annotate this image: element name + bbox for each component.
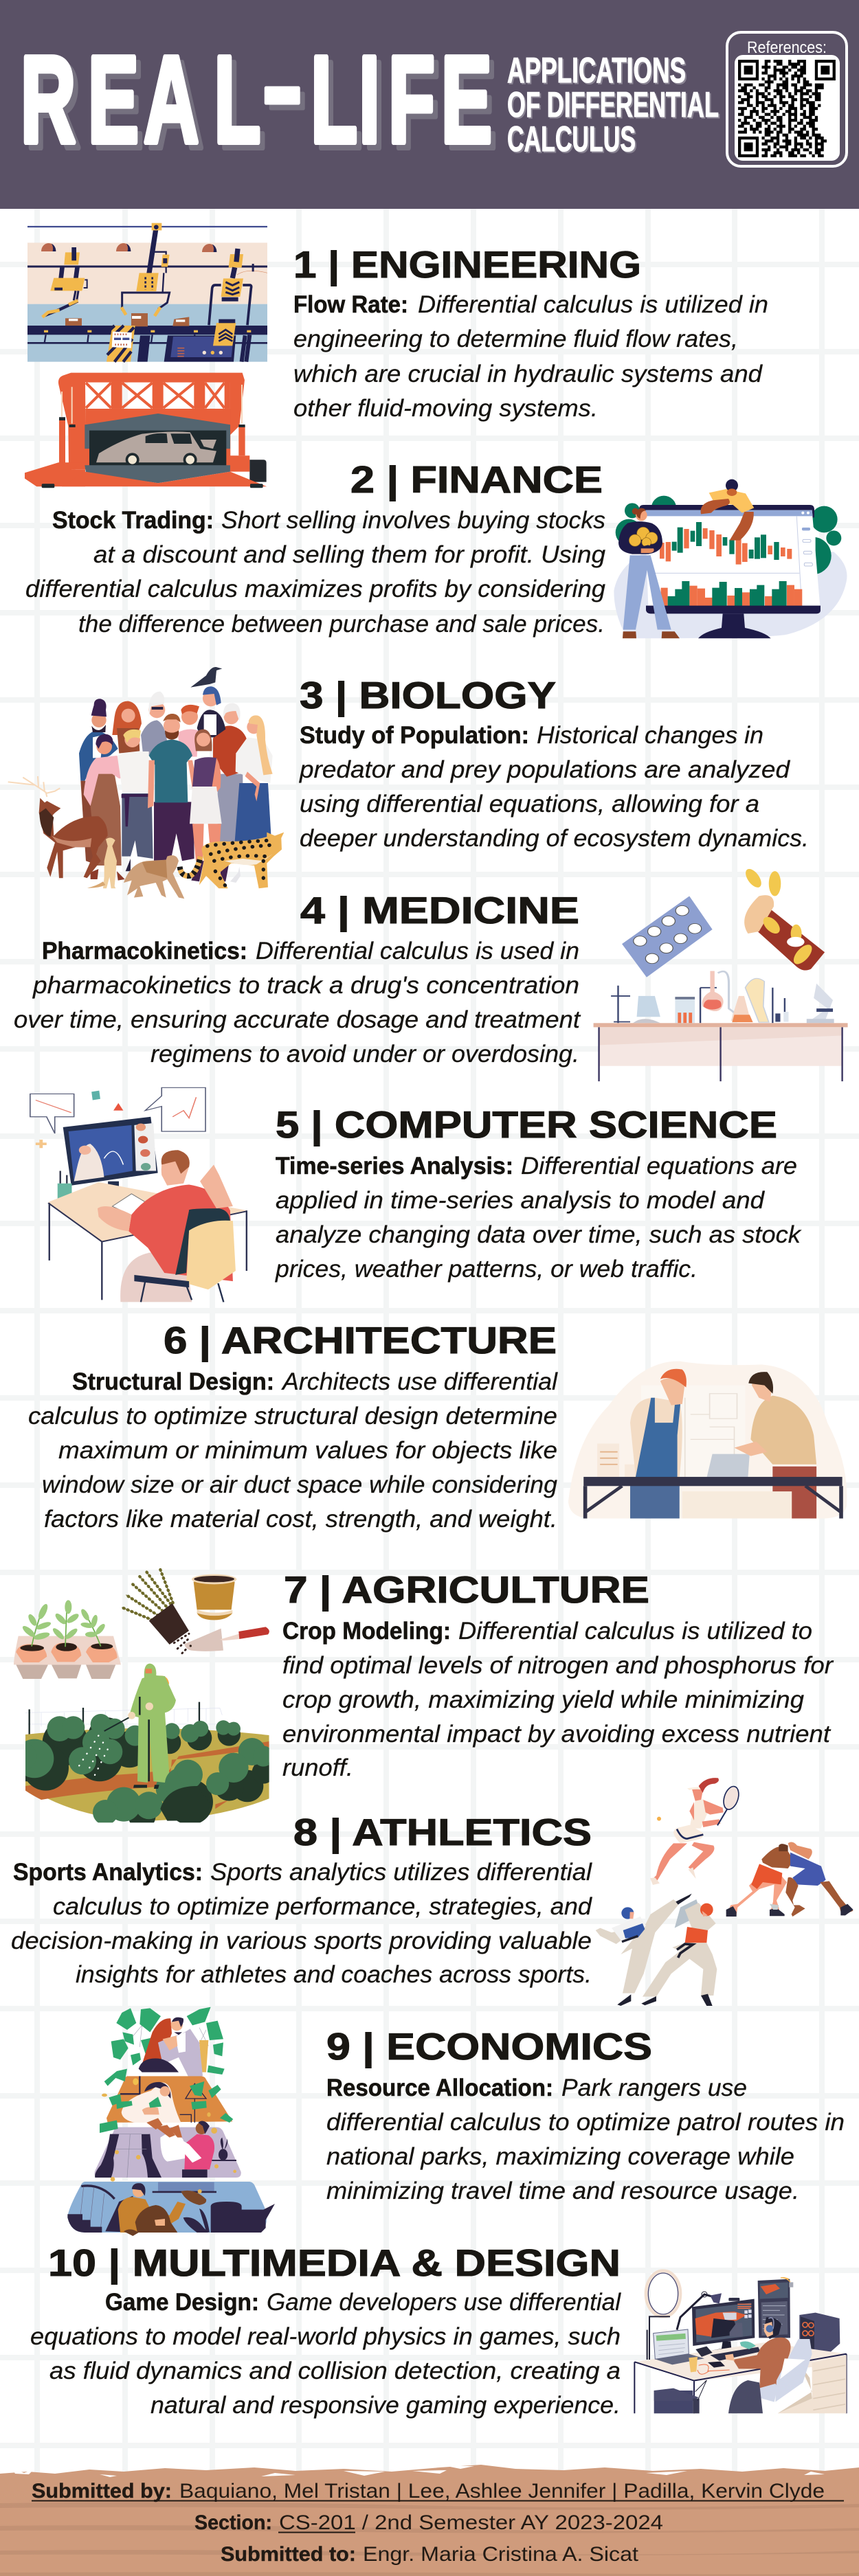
subtitle: CALCULUS [507,120,636,159]
body text: differential calculus maximizes profits by considering [25,576,606,602]
illustrations: tennis, wrestling, taekwondo [596,1778,854,2006]
heading: 4 | MEDICINE [300,889,579,932]
body text: Differential calculus is utilized in [418,291,768,318]
torn paper band [0,2465,859,2576]
body text: Differential calculus is utilized to [458,1618,812,1645]
illustrations: seedlings, plant, pot, trowel, sprayer in field [9,1570,275,1829]
body text: analyze changing data over time, such as stock [276,1221,802,1248]
body text: minimizing travel time and resource usage. [326,2178,799,2204]
icon: flower pot [192,1574,236,1620]
body text: applied in time-series analysis to model and [276,1187,766,1214]
panel: 3 biology [8,667,809,899]
body text [30,2289,621,2419]
illustration: stock chart monitor [614,479,847,638]
title: LIFE [311,30,492,168]
body text: Architects use differential [281,1368,558,1395]
body text: differential calculus to optimize patrol routes in [326,2109,845,2136]
body text: over time, ensuring accurate dosage and treatment [14,1006,581,1033]
icon: trowel [184,1627,269,1651]
second tier [102,2069,233,2123]
heading: 3 | BIOLOGY [300,674,556,717]
body text: predator and prey populations are analyzed [299,756,791,783]
body text: national parks, maximizing coverage while [326,2143,794,2170]
heading: 6 | ARCHITECTURE [164,1319,557,1362]
body text: calculus to optimize structural design determine [28,1403,557,1430]
body text: Differential calculus is used in [256,938,579,964]
panel: 7 agriculture [9,1568,834,1829]
body text: which are crucial in hydraulic systems and [293,361,763,387]
submitted to: Submitted to: [221,2543,356,2566]
body text: Sports Analytics: [13,1859,203,1886]
icon: tennis player [650,1778,741,1885]
illustration: game developer desk [634,2271,847,2413]
body text: prices, weather patterns, or web traffic. [275,1256,698,1283]
panel: 8 athletics [11,1778,854,2006]
illustration: pills and lab bench [594,867,848,1081]
subtitle: OF DIFFERENTIAL [507,85,719,125]
body text: regimens to avoid under or overdosing. [150,1041,579,1067]
body text [14,938,581,1067]
body text: Historical changes in [537,722,763,749]
submitted to [221,2543,639,2566]
body text: factors like material cost, strength, and weight. [44,1506,557,1533]
icon: taekwondo fighters [596,1894,717,2006]
body text: crop growth, maximizing yield while minimizing [282,1686,805,1713]
body text: decision-making in various sports providing valuable [11,1928,592,1954]
field scene [25,1664,269,1823]
lab glassware [611,986,785,1023]
body text: maximum or minimum values for objects like [58,1437,557,1464]
body text [293,291,768,422]
body text [11,1859,593,1988]
illustration: people and animals [8,667,284,899]
body text [275,1153,802,1283]
body text [326,2075,845,2204]
title: REAL [21,30,260,168]
top tier [111,2007,225,2080]
body text [25,507,606,637]
panel: 10 multimedia and design [30,2241,847,2419]
panel: 4 medicine [14,867,848,1081]
references QR card [727,32,847,166]
body text: Crop Modeling: [282,1618,451,1645]
title: - [261,14,304,156]
body text: insights for athletes and coaches across sports. [76,1961,592,1988]
body text [28,1368,558,1533]
body text: Game developers use differential [267,2289,621,2316]
icon: wrestlers [726,1842,854,1917]
panel: 2 finance [25,458,847,638]
body text: other fluid-moving systems. [293,395,598,422]
title [21,14,492,168]
section: CS-201 / 2nd Semester AY 2023-2024 [279,2511,663,2534]
body text: Differential equations are [521,1153,797,1179]
body text [299,722,809,852]
body text: Structural Design: [72,1368,274,1395]
body text: Game Design: [105,2289,259,2316]
icon: crow [190,667,222,688]
panel: 5 computer science [30,1087,802,1302]
body text [282,1618,834,1781]
heading: 8 | ATHLETICS [293,1811,592,1854]
body text: Short selling involves buying stocks [221,507,605,534]
illustration: car crusher [25,373,267,488]
icon: seedling tray [14,1600,121,1679]
subtitle: APPLICATIONS [507,51,686,91]
body text: Sports analytics utilizes differential [210,1859,592,1886]
body text: pharmacokinetics to track a drug's concentration [32,972,579,999]
submitted by: Submitted by: [32,2480,172,2502]
body text: Park rangers use [561,2075,747,2101]
QR code [738,60,836,157]
footer [0,2465,859,2576]
body text: Flow Rate: [293,291,408,318]
submitted by: Baquiano, Mel Tristan | Lee, Ashlee Jennifer | Padilla, Kervin Clyde [179,2480,825,2502]
illustration: architects at table [568,1361,847,1519]
illustration: wealth pyramid [67,2007,275,2236]
panel: 6 architecture [28,1319,847,1533]
lab table [594,1023,848,1027]
third tier [94,2118,241,2182]
panel: 1 engineering [25,223,768,488]
heading: 10 | MULTIMEDIA & DESIGN [48,2241,621,2285]
body text: environmental impact by avoiding excess nutrient [282,1721,831,1748]
body text: Resource Allocation: [326,2075,553,2101]
icon: uprooted plant [122,1570,190,1653]
body text: at a discount and selling them for profit. Using [93,541,606,568]
body text: calculus to optimize performance, strategies, and [53,1893,593,1920]
body text: deeper understanding of ecosystem dynamics. [300,825,809,852]
bottom tier [67,2182,275,2236]
section: Section: [194,2511,272,2534]
heading: 7 | AGRICULTURE [284,1568,649,1612]
body text: engineering to determine fluid flow rates, [293,326,738,352]
body text: Stock Trading: [52,507,214,534]
illustration: factory robot arms [27,223,267,362]
heading: 1 | ENGINEERING [293,243,641,286]
icon: pill bottle [750,907,825,971]
heading: 5 | COMPUTER SCIENCE [276,1103,777,1146]
references QR card: References: [747,38,827,57]
heading: 2 | FINANCE [350,458,603,501]
body text: Pharmacokinetics: [42,938,247,964]
panel: 9 economics [67,2007,845,2236]
body text: find optimal levels of nitrogen and phosphorus for [282,1652,834,1679]
body text: window size or air duct space while considering [42,1471,558,1498]
body text: equations to model real-world physics in games, such [30,2323,621,2350]
body text: the difference between purchase and sale prices. [78,611,605,637]
icon: blister pack [622,896,713,978]
heading: 9 | ECONOMICS [326,2025,652,2068]
subtitle [507,51,719,159]
submitted to: Engr. Maria Cristina A. Sicat [363,2543,639,2566]
body text: as fluid dynamics and collision detection, creating a [49,2358,621,2384]
body text: runoff. [282,1754,353,1781]
body text: natural and responsive gaming experience. [150,2392,621,2419]
body text: Study of Population: [300,722,529,749]
header banner [0,0,859,209]
body text: using differential equations, allowing for a [300,791,759,817]
body text: Time-series Analysis: [276,1153,513,1179]
illustration: person at computer [30,1087,247,1302]
